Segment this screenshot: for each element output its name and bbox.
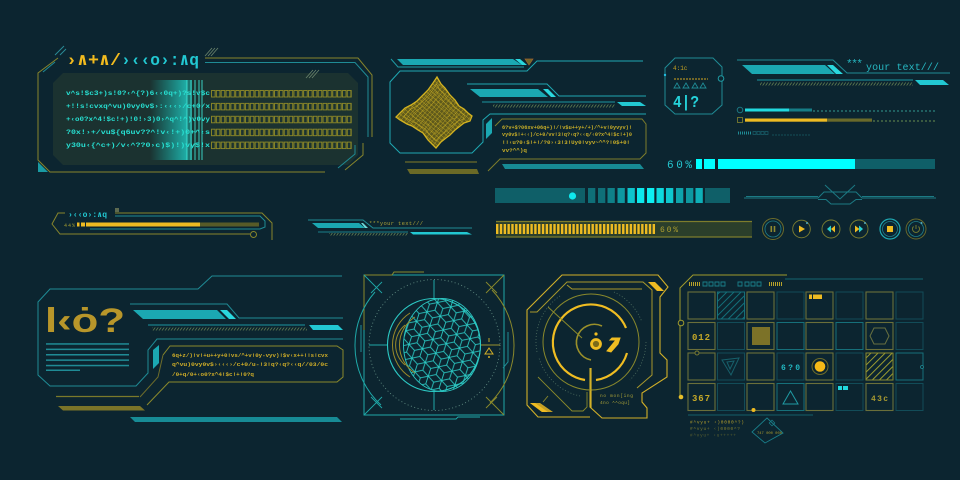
heading: data/decoding: ›∧+∧/ (66, 52, 121, 71)
icon: play button (793, 220, 810, 238)
icon: rewind button (822, 220, 840, 238)
heading: decoding: ›‹‹o›:∧q (68, 211, 107, 220)
text block: 4no ^^oqu] (600, 400, 630, 406)
heading: data/decoding (66, 52, 199, 71)
text lines (46, 343, 129, 371)
heading: large code: l‹ȯ? (45, 302, 125, 340)
text block: vv?^^)q (502, 148, 527, 154)
chart: faceted sphere (404, 299, 480, 391)
chart: 60% progress bar: 60% (667, 160, 692, 172)
grid cells olive (688, 292, 893, 410)
cell: yellow circle (812, 358, 828, 374)
cell: hexagon (870, 328, 889, 344)
chart: yellow 60% progress: 60% (660, 226, 678, 235)
text block (502, 125, 632, 154)
cell: radar triangle (722, 358, 739, 375)
outer arcs (355, 290, 514, 405)
panel: your text header bars (737, 59, 950, 86)
chart: yellow 60% progress (496, 222, 752, 237)
decorative circuit chevron (744, 185, 936, 204)
panel: data decoding console (38, 46, 372, 172)
text block: cipher rows: ?0x!›+/vu${q6uv??^!v‹!+)0+^‹s (66, 128, 210, 136)
cell: label 012: 012 (692, 333, 710, 343)
panel: your text header bars: *** (846, 59, 863, 71)
legend: #^vyu+ ‹u+++++ (690, 432, 736, 438)
arrow (607, 338, 620, 352)
chart: 60% progress bar (667, 159, 935, 172)
panel: code readout (38, 276, 343, 422)
chart: wireframe mesh (395, 76, 473, 149)
text block (600, 393, 633, 406)
icon: stop button (880, 219, 900, 239)
panel: decoding progress (52, 208, 272, 240)
text block: cipher rows: +!!s!cvxq^vu)0vy0v$›:‹‹‹›/c+0/x (66, 102, 210, 110)
text block: /0+q/0+‹o0?x^4!$c!+!0?q (172, 371, 254, 378)
panel: small octagon gauge: 4:1c (673, 65, 688, 72)
badge (752, 418, 783, 443)
legend: #^vyu+ ‹)0000^?) (690, 420, 744, 426)
cell: cyan tabs (838, 386, 848, 390)
panel: control grid (678, 275, 924, 443)
text block: q^vu)0vy0v$›‹‹‹›/c+0/u-!3!q?‹q?‹‹q//03/0c (172, 361, 328, 368)
panel: small octagon gauge: 4|? (673, 94, 699, 113)
legend: #^vyu+ ‹)0000^? (690, 426, 740, 432)
text block: 6q+z/)!v!+u++y+0!vs/^+v!0y-vyv)!$v‹x++!!s!cvx (172, 352, 329, 359)
icon: pause button (762, 218, 784, 240)
icon: power button (906, 219, 926, 239)
cell: filled square (752, 327, 770, 345)
text block (172, 352, 329, 378)
cell: triangle (783, 391, 798, 404)
text block: cipher rows: +‹o0?x^4!$c!+)!0!›3)0›^q^!^)v0vy (66, 115, 210, 123)
icon: target dot (592, 332, 600, 348)
text block: !!‹u?0‹$!+!/?0›‹3!3!Uy0!vyv~^^?!0$+0! (502, 140, 630, 146)
chart: cyan and yellow progress lines (737, 107, 935, 135)
panel: small octagon gauge (664, 58, 724, 114)
icon: forward button (850, 220, 868, 238)
icon: warning triangle (525, 59, 533, 65)
panel: globe scanner (355, 272, 514, 419)
badge: 747 000 000 (757, 432, 783, 436)
cell: label 43c: 43c (871, 395, 888, 404)
text block: no mon[ing (600, 393, 633, 399)
text block: cipher rows (66, 89, 210, 149)
cell: yellow tabs (809, 294, 822, 299)
cell: label 609: 6?0 (781, 364, 800, 373)
grid cells teal (718, 292, 923, 410)
panel: radar gauge (527, 275, 668, 418)
panel: decoding progress: 44% (64, 223, 75, 229)
text block: cipher rows: y30u‹{^c+)/v‹^??0›c)$)!)vy$!x (66, 141, 210, 149)
heading: data/decoding: ›‹‹o›:∧q (121, 52, 199, 71)
panel: small your text bars: ***your text/// (369, 220, 423, 227)
cell: label 367: 367 (692, 394, 710, 404)
icon: alert triangle marker (485, 338, 493, 358)
text block: vy0v$!+‹‹)/c+0/vv!3!q?‹q?‹‹q/‹0?x^4!$c!+)0 (502, 132, 632, 138)
thick arc (553, 304, 627, 380)
chart: segmented slider (495, 188, 730, 203)
panel: your text header bars: your text/// (866, 62, 939, 74)
panel: small your text bars (308, 220, 472, 236)
legend (690, 420, 744, 438)
panel: wireframe terrain readout (390, 59, 646, 174)
text block: 6?v+$?06xv+06q+)!/!v$u++y+/+)/^+v!0yvyv)! (502, 125, 632, 131)
text block: cipher rows: v^s!$c3+)s!0?‹^{?)6‹‹0q+)?s!v$c (66, 89, 210, 97)
